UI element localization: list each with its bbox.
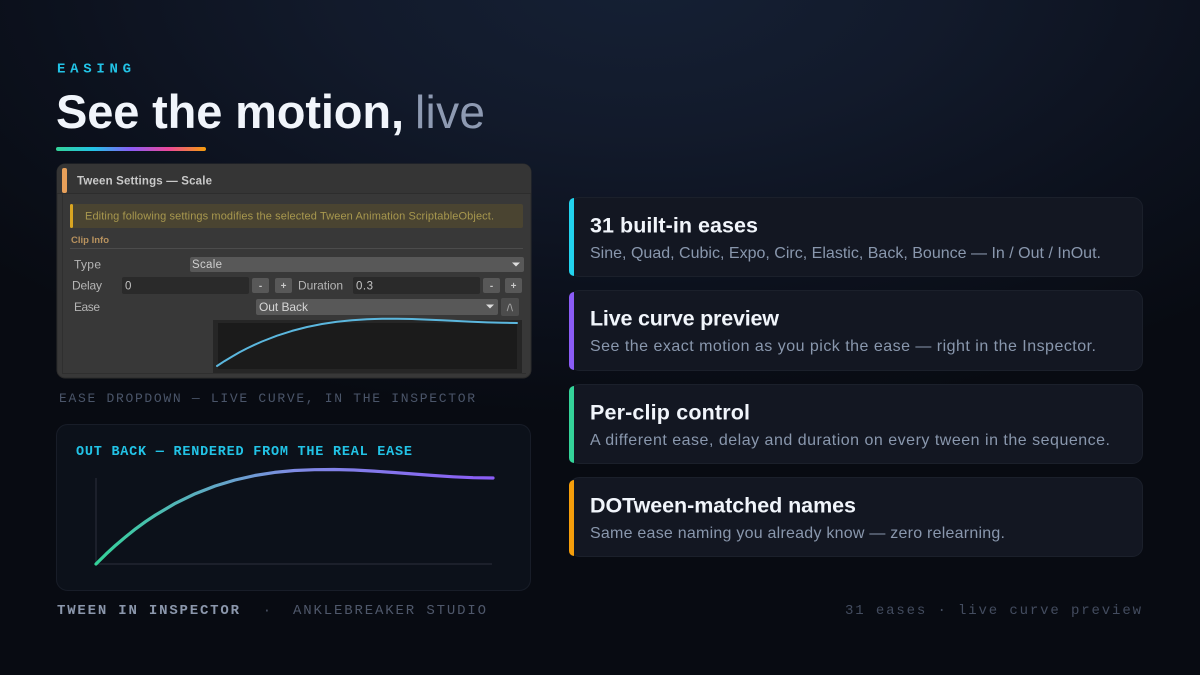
card: per-clip control (569, 384, 1142, 464)
footer right: summary: 31 eases · live curve preview (845, 603, 1142, 619)
title: live (415, 86, 485, 138)
caption: inspector: EASE DROPDOWN — LIVE CURVE, IN THE INSPECTOR (59, 391, 475, 406)
card accent (569, 480, 574, 556)
delay and duration row: - (490, 281, 493, 292)
type row (74, 257, 524, 272)
delay and duration row: 0 (125, 280, 131, 292)
title gradient underline (56, 147, 206, 151)
card description: A different ease, delay and duration on every tween in the sequence. (590, 432, 1110, 449)
clip info heading: Clip Info (71, 235, 109, 246)
warning notice (70, 204, 523, 228)
delay and duration row: Delay (72, 278, 102, 292)
card: 31 built-in eases (569, 198, 1142, 276)
card title: Per-clip control (590, 400, 750, 424)
card accent (569, 292, 574, 370)
card: dotween-matched names (569, 478, 1142, 556)
title: See the motion, (56, 85, 404, 138)
delay and duration row: + (281, 281, 287, 292)
type row: Type (74, 258, 101, 272)
inspector curve preview (213, 319, 522, 373)
eyebrow: easing: EASING (57, 62, 131, 78)
ease row (74, 298, 519, 316)
delay and duration row (72, 277, 522, 294)
card description: Sine, Quad, Cubic, Expo, Circ, Elastic, Back, Bounce — In / Out / InOut. (590, 245, 1101, 262)
chart heading: OUT BACK — RENDERED FROM THE REAL EASE (76, 445, 412, 460)
panel: inspector screenshot (57, 164, 531, 378)
card accent (569, 386, 574, 463)
chart axes (96, 478, 492, 564)
inspector header: Tween Settings — Scale (77, 176, 212, 188)
delay and duration row: Duration (298, 278, 343, 292)
warning notice: Editing following settings modifies the selected Tween Animation ScriptableObject. (85, 210, 494, 222)
footer left: deck labels: · (263, 603, 271, 618)
card title: Live curve preview (590, 306, 779, 330)
card: live curve preview (569, 290, 1142, 370)
delay and duration row: - (259, 281, 262, 292)
footer left: deck labels: TWEEN IN INSPECTOR (57, 603, 240, 619)
out back curve (96, 470, 493, 564)
card title: DOTween-matched names (590, 494, 856, 518)
card description: See the exact motion as you pick the ease — right in the Inspector. (590, 338, 1096, 355)
inspector header (57, 164, 531, 194)
ease row: Out Back (259, 300, 309, 314)
card accent (569, 198, 574, 276)
delay and duration row: + (511, 281, 517, 292)
card description: Same ease naming you already know — zero relearning. (590, 525, 1005, 542)
footer left: deck labels: ANKLEBREAKER STUDIO (293, 603, 486, 619)
type row: Scale (192, 259, 222, 271)
panel: out back curve chart (56, 424, 530, 590)
footer left: deck labels (57, 603, 486, 619)
delay and duration row: 0.3 (356, 280, 373, 292)
card title: 31 built-in eases (590, 214, 758, 238)
ease row: Ease (74, 300, 100, 314)
